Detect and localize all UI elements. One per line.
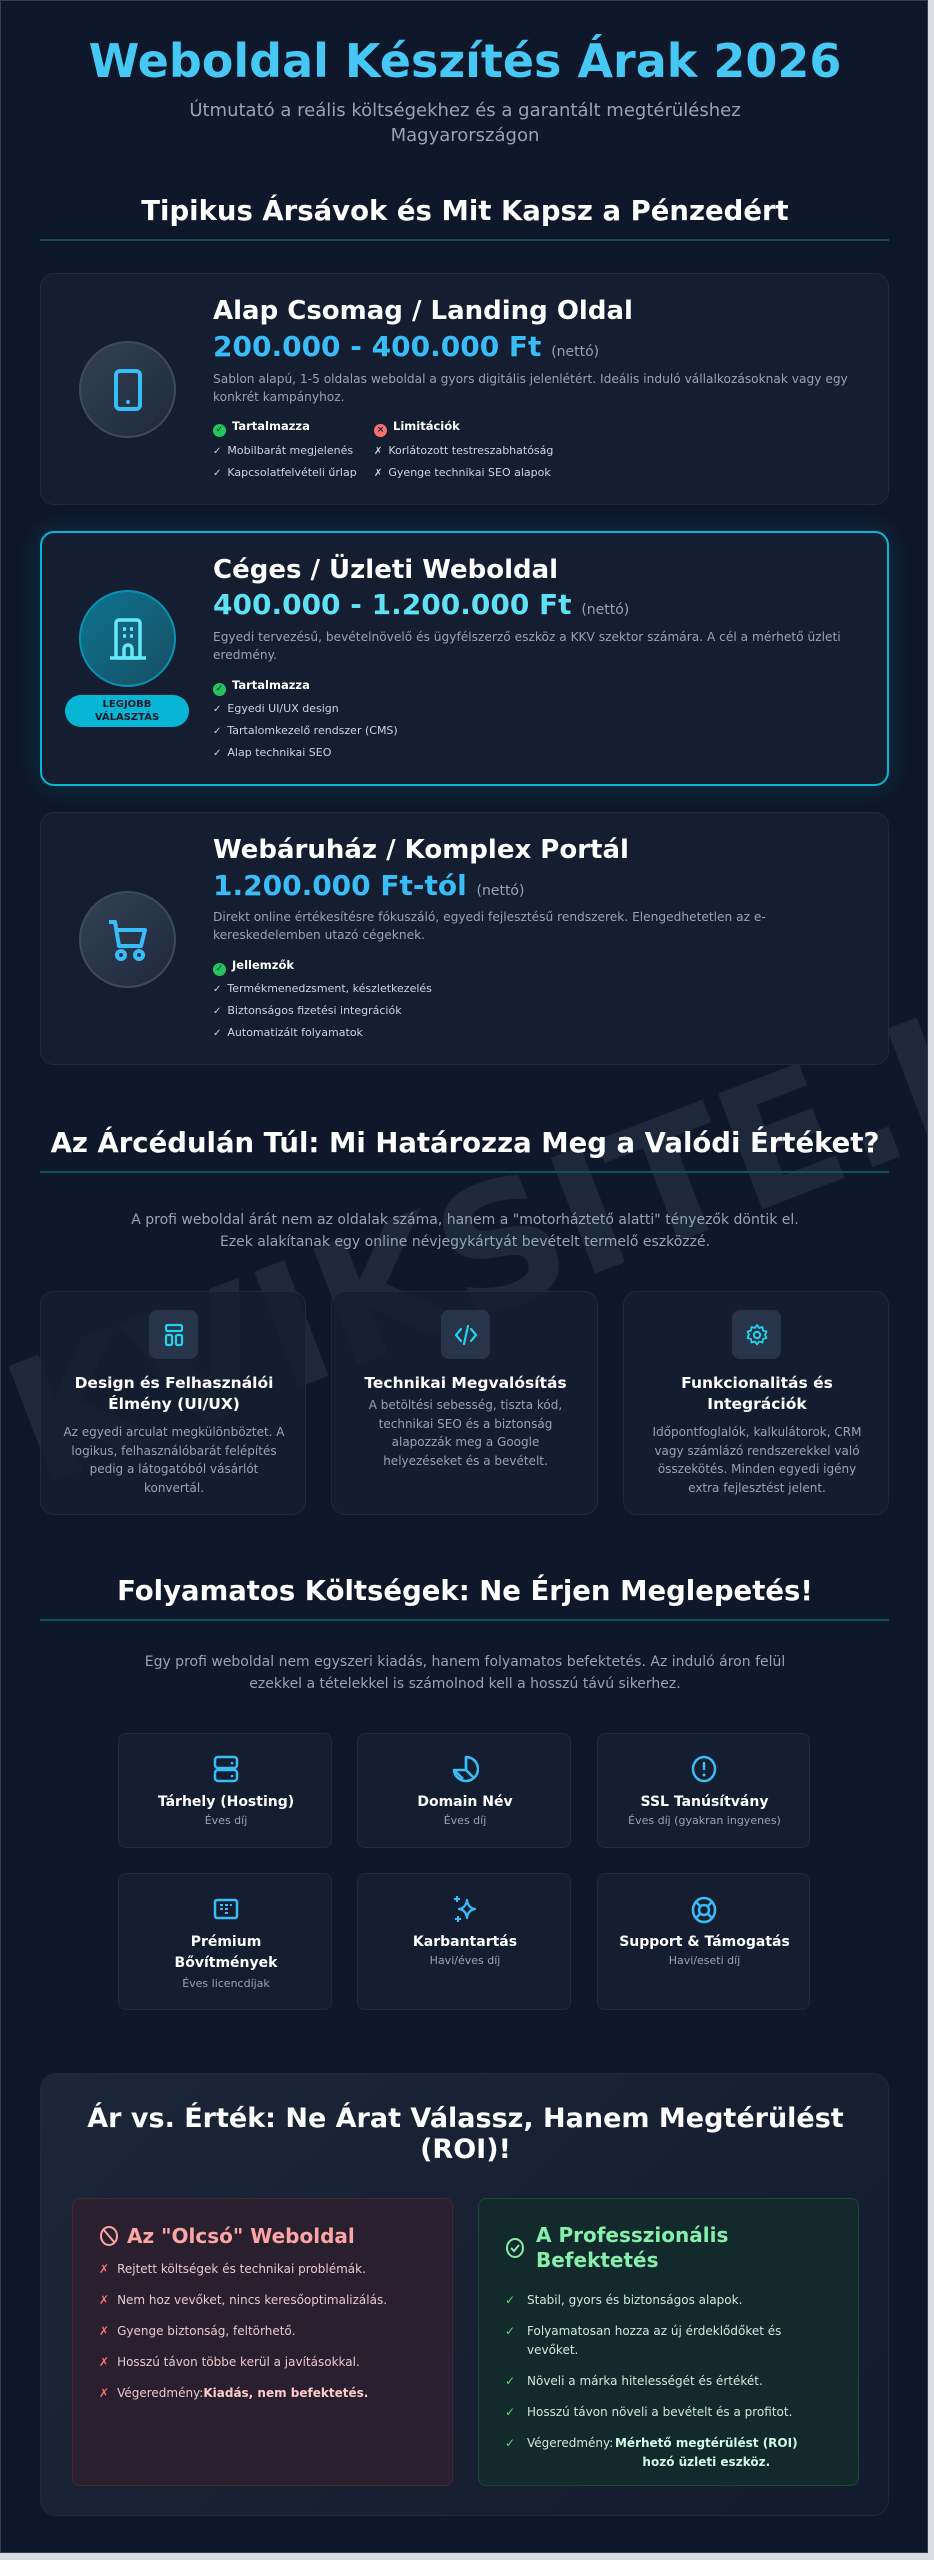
- card 1 limitations: ×: [377, 425, 384, 435]
- cost: ssl: Éves díj (gyakran ingyenes): [628, 1814, 781, 1827]
- panel: cheap site: [72, 2198, 453, 2486]
- badge: best choice: LEGJOBB: [103, 699, 151, 710]
- cost: domain: Domain Név: [417, 1794, 513, 1810]
- roi title: Ár vs. Érték: Ne Árat Válassz, Hanem Megtérülést (ROI)!: [87, 2103, 844, 2165]
- panel: card 2 business: [40, 531, 889, 786]
- panel: card 3 webshop: [40, 812, 889, 1065]
- card 3 features: ✓ Biztonságos fizetési integrációk: [213, 1004, 402, 1017]
- card 2 includes: ✓: [216, 684, 223, 694]
- cheap list: ✗ Hosszú távon többe kerül a javításokkal.: [99, 2355, 360, 2369]
- badge: best choice: VÁLASZTÁS: [95, 712, 159, 723]
- icon: building: [79, 590, 176, 687]
- cheap list: ✗ Gyenge biztonság, feltörhető.: [99, 2324, 296, 2338]
- panel: technical: [331, 1291, 598, 1515]
- card 3 features: ✓ Automatizált folyamatok: [213, 1026, 363, 1039]
- cost: hosting: [118, 1733, 332, 1848]
- cost: hosting: Éves díj: [205, 1814, 247, 1827]
- panel: functionality: [623, 1291, 889, 1515]
- intro text: Ezek alakítanak egy online névjegykártyát bevételt termelő eszközzé.: [220, 1234, 710, 1250]
- card 1 limitations: Limitációk: [393, 419, 460, 433]
- icon: phone: [79, 341, 176, 438]
- icon: cart: [79, 891, 176, 988]
- card 1 includes: [213, 419, 357, 479]
- pro list: Mérhető megtérülést (ROI) hozó üzleti eszköz.: [615, 2436, 798, 2469]
- cost: premium plugins: Éves licencdíjak: [182, 1977, 270, 1990]
- card 2 includes: [213, 678, 398, 759]
- design text: Az egyedi arculat megkülönböztet. A logikus, felhasználóbarát felépítés pedig a látogatóból vásárlót konvertál.: [63, 1425, 285, 1494]
- pro list: Stabil, gyors és biztonságos alapok.: [527, 2293, 742, 2307]
- card 1 includes: Tartalmazza: [232, 419, 310, 433]
- icon: code: [441, 1310, 490, 1359]
- pro list: [505, 2293, 798, 2469]
- card 2 includes: ✓ Egyedi UI/UX design: [213, 702, 339, 715]
- design title: Design és Felhasználói Élmény (UI/UX): [75, 1374, 273, 1413]
- cheap list: [99, 2262, 387, 2400]
- pro list: ✓: [505, 2374, 515, 2388]
- pro list: Növeli a márka hitelességét és értékét.: [527, 2374, 763, 2388]
- panel: price vs value: [40, 2073, 889, 2516]
- pro list: Hosszú távon növeli a bevételt és a profitot.: [527, 2405, 792, 2419]
- cost: ssl: SSL Tanúsítvány: [641, 1794, 768, 1810]
- panel: design: [40, 1291, 306, 1515]
- functionality title: Funkcionalitás és Integrációk: [681, 1374, 833, 1413]
- cost: premium plugins: Prémium Bővítmények: [175, 1934, 277, 1971]
- card 3 price: 1.200.000 Ft-tól (nettó): [213, 869, 524, 902]
- cost: support: Support & Támogatás: [619, 1934, 790, 1950]
- card 3 title: Webáruház / Komplex Portál: [213, 835, 629, 865]
- card 2 price: 400.000 - 1.200.000 Ft (nettó): [213, 588, 629, 621]
- cost: hosting: Tárhely (Hosting): [158, 1794, 294, 1810]
- card 1 includes: ✓: [216, 425, 223, 435]
- card 3 features: Jellemzők: [232, 958, 294, 972]
- subtitle: Útmutató a reális költségekhez és a garantált megtérüléshez Magyarországon: [189, 100, 741, 146]
- cost: domain: [357, 1733, 571, 1848]
- badge: best choice: [65, 695, 189, 727]
- cost: support: [597, 1873, 810, 2010]
- cost: ssl: [597, 1733, 810, 1848]
- heading: ongoing costs: Folyamatos Költségek: Ne Érjen Meglepetés!: [117, 1575, 813, 1607]
- cheap list: ✗ Nem hoz vevőket, nincs keresőoptimalizálás.: [99, 2293, 387, 2307]
- pro list: Folyamatosan hozza az új érdeklődőket és vevőket.: [527, 2324, 781, 2357]
- pro heading: A Professzionális Befektetés: [536, 2223, 728, 2272]
- card 2 includes: Tartalmazza: [232, 678, 310, 692]
- panel: professional: [478, 2198, 859, 2486]
- card 2 includes: ✓ Tartalomkezelő rendszer (CMS): [213, 724, 398, 737]
- card 1 description: Sablon alapú, 1-5 oldalas weboldal a gyors digitális jelenlétért. Ideális induló vállalkozásoknak vagy egy konkrét kampányhoz.: [213, 372, 848, 404]
- intro text: [131, 1212, 799, 1250]
- cheap list: ✗ Rejtett költségek és technikai problémák.: [99, 2262, 366, 2276]
- card 1 limitations: ✗ Korlátozott testreszabhatóság: [374, 444, 553, 457]
- functionality text: Időpontfoglalók, kalkulátorok, CRM vagy számlázó rendszerekkel való összekötés. Minden egyedi igény extra fejlesztést jelent.: [653, 1425, 861, 1494]
- card 3 features: [213, 958, 432, 1039]
- pro list: ✓: [505, 2405, 515, 2419]
- card 3 description: Direkt online értékesítésre fókuszáló, egyedi fejlesztésű rendszerek. Elengedhetetlen az e-kereskedelemben utazó cégeknek.: [213, 910, 766, 942]
- card 1 limitations: ✗ Gyenge technikai SEO alapok: [374, 466, 551, 479]
- intro text costs: Egy profi weboldal nem egyszeri kiadás, hanem folyamatos befektetés. Az induló áron felül ezekkel a tételekkel is számolnod kell a hosszú távú sikerhez.: [145, 1654, 785, 1692]
- card 1 includes: ✓ Mobilbarát megjelenés: [213, 444, 353, 457]
- intro text: A profi weboldal árát nem az oldalak száma, hanem a "motorháztető alatti" tényezők döntik el.: [131, 1212, 799, 1228]
- icon: layout: [149, 1310, 198, 1359]
- panel: card 1 basic: [40, 273, 889, 505]
- technical text: A betöltési sebesség, tiszta kód, technikai SEO és a biztonság alapozzák meg a Google helyezéseket és a bevételt.: [369, 1398, 562, 1468]
- cost: premium plugins: [118, 1873, 332, 2010]
- cost: maintenance: [357, 1873, 571, 2010]
- cheap heading: Az "Olcsó" Weboldal: [127, 2224, 355, 2248]
- heading: price tiers: Tipikus Ársávok és Mit Kapsz a Pénzedért: [141, 195, 789, 227]
- card 3 features: ✓ Termékmenedzsment, készletkezelés: [213, 982, 432, 995]
- card 3 features: ✓: [216, 964, 223, 974]
- card 2 title: Céges / Üzleti Weboldal: [213, 555, 558, 585]
- cost: support: Havi/eseti díj: [669, 1954, 740, 1967]
- pro list: ✓: [505, 2324, 515, 2338]
- cost: domain: Éves díj: [444, 1814, 486, 1827]
- cost: maintenance: Karbantartás: [413, 1934, 517, 1950]
- pro list: ✓: [505, 2436, 515, 2450]
- icon: gear: [732, 1310, 781, 1359]
- card 1 includes: ✓ Kapcsolatfelvételi űrlap: [213, 466, 357, 479]
- pro list: ✓: [505, 2293, 515, 2307]
- title: Weboldal Készítés Árak 2026: [89, 34, 841, 88]
- card 2 description: Egyedi tervezésű, bevételnövelő és ügyfélszerző eszköz a KKV szektor számára. A cél a mérhető üzleti eredmény.: [213, 630, 841, 662]
- cheap list: ✗ Végeredmény:Kiadás, nem befektetés.: [99, 2386, 368, 2400]
- card 1 price: 200.000 - 400.000 Ft (nettó): [213, 330, 599, 363]
- card 1 limitations: [374, 419, 553, 479]
- card 1 title: Alap Csomag / Landing Oldal: [213, 296, 633, 326]
- pro list: Végeredmény:: [527, 2436, 613, 2450]
- cost: maintenance: Havi/éves díj: [430, 1954, 500, 1967]
- heading: beyond price: Az Árcédulán Túl: Mi Határozza Meg a Valódi Értéket?: [51, 1127, 879, 1159]
- card 2 includes: ✓ Alap technikai SEO: [213, 746, 331, 759]
- technical title: Technikai Megvalósítás: [364, 1374, 567, 1392]
